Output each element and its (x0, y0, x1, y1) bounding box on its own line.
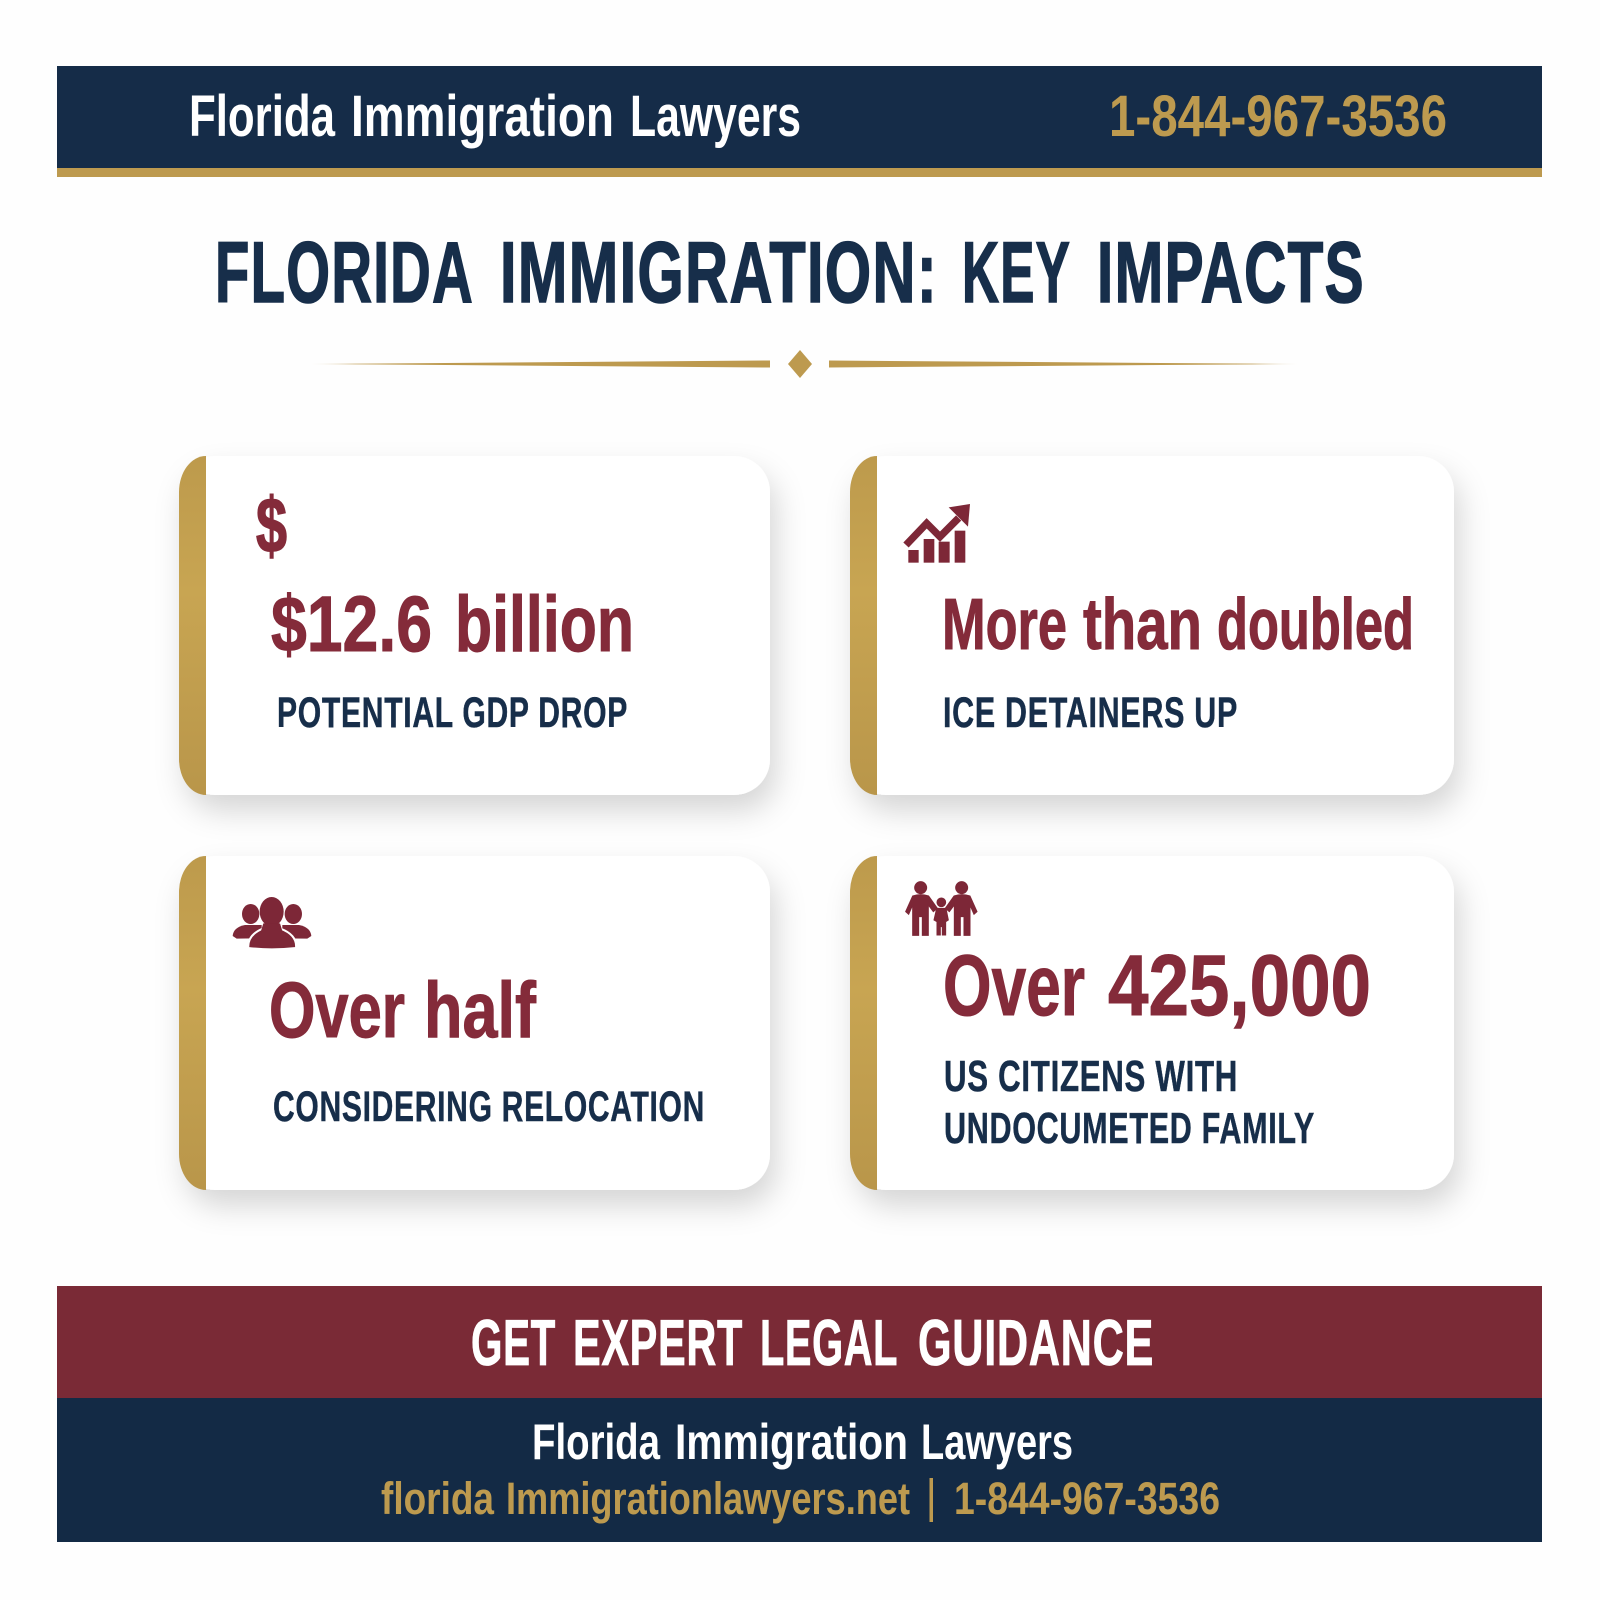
footer phone number: 1-844-967-3536 (954, 1473, 1220, 1524)
label: US citizens with undocumented family: UNDOCUMETED FAMILY (944, 1104, 1315, 1153)
call to action heading: GUIDANCE (918, 1306, 1154, 1379)
footer firm name: Lawyers (921, 1414, 1073, 1470)
header firm name: Florida (189, 84, 336, 149)
title: KEY (962, 225, 1071, 321)
footer website: florida (381, 1473, 495, 1524)
stat: over half (269, 965, 537, 1054)
panel: ICE detainers card (850, 456, 1454, 795)
label: potential GDP drop: POTENTIAL GDP DROP (277, 689, 628, 737)
header phone number: 1-844-967-3536 (1109, 84, 1447, 149)
stat: more than doubled (942, 585, 1414, 665)
footer band (57, 1398, 1542, 1542)
icon: dollar sign: $ (256, 481, 287, 569)
panel: relocation card (179, 856, 770, 1190)
title: FLORIDA (215, 225, 474, 321)
title divider with diamond (309, 350, 1299, 378)
footer firm name: Immigration (675, 1414, 908, 1470)
stat: over 425,000 (943, 938, 1371, 1034)
title (215, 225, 1365, 321)
icon: rising bar chart (906, 504, 970, 563)
stat: more than doubled: More (942, 585, 1067, 665)
panel: US citizens card (850, 856, 1454, 1190)
call to action heading (471, 1306, 1154, 1379)
stat: more than doubled: than (1083, 585, 1202, 665)
footer website (381, 1473, 910, 1524)
label: US citizens with undocumented family (944, 1052, 1315, 1153)
stat: $12.6 billion (271, 579, 634, 668)
header firm name (189, 84, 801, 149)
title: IMMIGRATION: (500, 225, 938, 321)
stat: $12.6 billion: $12.6 (271, 579, 432, 668)
header firm name: Immigration (351, 84, 614, 149)
icon: group of people (233, 897, 311, 949)
footer firm name: Florida (532, 1414, 661, 1470)
footer firm name (532, 1414, 1073, 1470)
stat: over 425,000: 425,000 (1108, 938, 1371, 1034)
footer website: Immigrationlawyers.net (506, 1473, 910, 1524)
stat: more than doubled: doubled (1217, 585, 1414, 665)
header firm name: Lawyers (630, 84, 801, 149)
call to action heading: GET (471, 1306, 556, 1379)
call to action band (57, 1286, 1542, 1398)
label: ICE detainers up: ICE DETAINERS UP (943, 689, 1238, 737)
label: considering relocation: CONSIDERING RELOCATION (273, 1083, 705, 1131)
stat: over half: half (424, 965, 537, 1054)
call to action heading: LEGAL (760, 1306, 898, 1379)
call to action heading: EXPERT (573, 1306, 743, 1379)
icon: family (906, 882, 977, 935)
footer separator (930, 1478, 933, 1522)
title: IMPACTS (1097, 225, 1365, 321)
panel: GDP drop card (179, 456, 770, 795)
stat: $12.6 billion: billion (455, 579, 634, 668)
label: US citizens with undocumented family: US CITIZENS WITH (944, 1052, 1238, 1101)
header band (57, 66, 1542, 177)
stat: over half: Over (269, 965, 405, 1054)
stat: over 425,000: Over (943, 938, 1085, 1034)
